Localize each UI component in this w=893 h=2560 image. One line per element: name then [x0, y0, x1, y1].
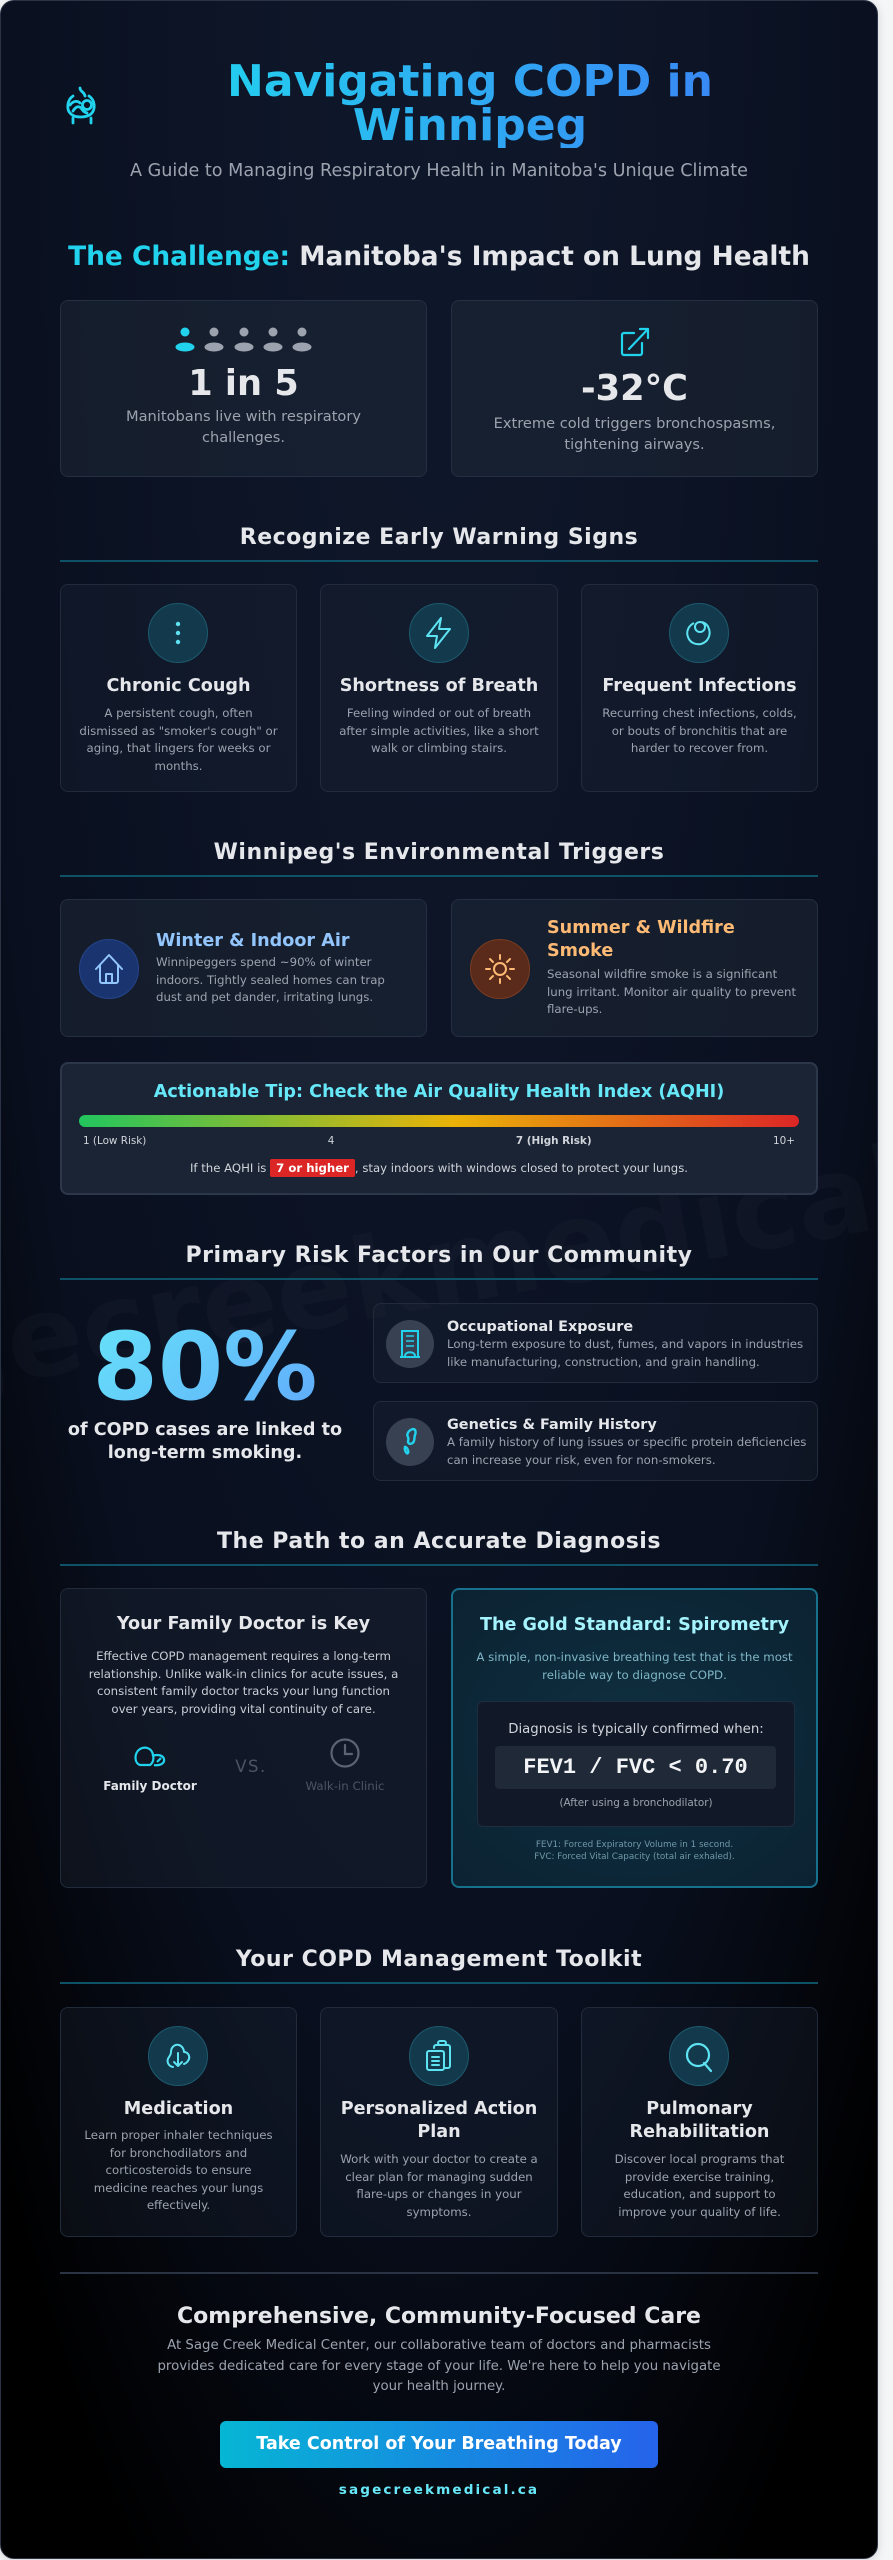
icon: people row [176, 328, 312, 352]
heading: environmental triggers: Winnipeg's Environmental Triggers [214, 840, 664, 865]
panel: summer and wildfire smoke [451, 899, 818, 1037]
footer divider [60, 2272, 818, 2274]
subtitle: A Guide to Managing Respiratory Health in Manitoba's Unique Climate [130, 161, 748, 181]
card title: Frequent Infections [602, 676, 797, 696]
abbreviations note: FVC: Forced Vital Capacity (total air exhaled). [534, 1852, 735, 1862]
tip title: Actionable Tip: Check the Air Quality Health Index (AQHI) [154, 1082, 724, 1102]
card text: Discover local programs that provide exercise training, education, and support to improve your quality of life. [615, 2152, 784, 2219]
icon: clipboard [409, 2026, 469, 2086]
icon: lungs logo [66, 86, 96, 124]
panel: spirometry [451, 1588, 818, 1888]
icon: infection [669, 603, 729, 663]
card text: Learn proper inhaler techniques for bronchodilators and corticosteroids to ensure medicine reaches your lungs effectively. [84, 2128, 273, 2212]
heading: toolkit: Your COPD Management Toolkit [236, 1947, 642, 1972]
panel: action plan [320, 2007, 558, 2237]
stat value: -32°C [581, 368, 688, 409]
card title: Pulmonary Rehabilitation [630, 2099, 769, 2142]
icon: house [79, 939, 139, 999]
heading: the challenge: The Challenge: Manitoba's Impact on Lung Health [68, 241, 810, 272]
label: Walk-in Clinic [305, 1779, 385, 1793]
card text: Winnipeggers spend ~90% of winter indoors. Tightly sealed homes can trap dust and pet dander, irritating lungs. [156, 955, 385, 1004]
stat description: Extreme cold triggers bronchospasms, tightening airways. [494, 415, 775, 453]
stat value: 1 in 5 [188, 363, 299, 404]
icon: magnifier [669, 2026, 729, 2086]
AQHI colour bar [79, 1115, 799, 1127]
card text: Seasonal wildfire smoke is a significant lung irritant. Monitor air quality to prevent flare-ups. [547, 967, 796, 1016]
panel: pulmonary rehabilitation [581, 2007, 818, 2237]
formula intro: Diagnosis is typically confirmed when: [508, 1722, 764, 1737]
panel: chronic cough [60, 584, 297, 792]
panel: frequent infections [581, 584, 818, 792]
card text: A persistent cough, often dismissed as "smoker's cough" or aging, that lingers for weeks or months. [79, 706, 278, 773]
stat description: Manitobans live with respiratory challenges. [126, 408, 361, 446]
icon: clock [330, 1738, 360, 1768]
AQHI scale labels: 7 (High Risk) [516, 1135, 592, 1147]
panel: family doctor [60, 1588, 427, 1888]
panel: medication [60, 2007, 297, 2237]
panel: 1 in 5 stat [60, 300, 427, 477]
card title: Winter & Indoor Air [156, 931, 350, 951]
icon: cloud download [148, 2026, 208, 2086]
vs label: VS. [235, 1757, 267, 1776]
tip text: If the AQHI is 7 or higher , stay indoors with windows closed to protect your lungs. [190, 1161, 688, 1175]
icon: dots [148, 603, 208, 663]
card title: Summer & Wildfire Smoke [547, 918, 735, 961]
heading: diagnosis: The Path to an Accurate Diagnosis [217, 1529, 661, 1554]
panel: cold stat [451, 300, 818, 477]
panel: genetics [373, 1401, 818, 1481]
call to action button: Take Control of Your Breathing Today [256, 2434, 622, 2454]
formula note: (After using a bronchodilator) [559, 1797, 713, 1809]
abbreviations note [534, 1840, 735, 1862]
AQHI scale labels [83, 1135, 795, 1147]
formula [495, 1746, 776, 1789]
heading: risk factors: Primary Risk Factors in Our Community [186, 1243, 692, 1268]
card text: Effective COPD management requires a long-term relationship. Unlike walk-in clinics for acute issues, a consistent family doctor tracks your lung function over years, providing vital continuity of care. [89, 1649, 398, 1716]
card title: Shortness of Breath [340, 676, 538, 696]
title: Navigating COPD in [227, 56, 713, 107]
card text: Recurring chest infections, colds, or bouts of bronchitis that are harder to recover from. [602, 706, 797, 755]
formula box [477, 1701, 795, 1827]
AQHI scale labels: 1 (Low Risk) [83, 1135, 146, 1147]
card text: Work with your doctor to create a clear plan for managing sudden flare-ups or changes in your symptoms. [340, 2152, 538, 2219]
icon: sun [470, 939, 530, 999]
card title: The Gold Standard: Spirometry [480, 1615, 789, 1635]
title: Winnipeg [353, 100, 587, 151]
abbreviations note: FEV1: Forced Expiratory Volume in 1 second. [536, 1840, 733, 1850]
card title: Genetics & Family History [447, 1417, 657, 1433]
card title: Medication [124, 2099, 233, 2119]
icon: external arrow [620, 328, 650, 356]
panel: AQHI tip [60, 1062, 818, 1195]
footer title: Comprehensive, Community-Focused Care [177, 2304, 701, 2329]
card title: Personalized Action Plan [341, 2099, 537, 2142]
card text: A family history of lung issues or specific protein deficiencies can increase your risk, even for non-smokers. [447, 1435, 806, 1467]
icon: lightning [409, 603, 469, 663]
card title: Occupational Exposure [447, 1319, 633, 1335]
heading: warning signs: Recognize Early Warning Signs [240, 525, 638, 550]
card title: Your Family Doctor is Key [117, 1614, 370, 1634]
formula: FEV1 / FVC < 0.70 [523, 1755, 748, 1780]
website link: sagecreekmedical.ca [339, 2482, 539, 2498]
call to action button [220, 2421, 658, 2468]
icon: doctor [134, 1746, 166, 1766]
footer text: At Sage Creek Medical Center, our collaborative team of doctors and pharmacists provides dedicated care for every stage of your life. We're here to help you navigate your health journey. [157, 2338, 721, 2394]
AQHI scale labels: 10+ [773, 1135, 795, 1147]
panel: occupational exposure [373, 1303, 818, 1383]
footer [60, 2272, 818, 2498]
icon: genes [386, 1418, 434, 1466]
card text: Feeling winded or out of breath after simple activities, like a short walk or climbing stairs. [339, 706, 539, 755]
panel: 80 percent stat [68, 1313, 342, 1463]
panel: shortness of breath [320, 584, 558, 792]
panel: winter and indoor air [60, 899, 427, 1037]
title [180, 60, 760, 148]
comparison: doctor vs clinic [103, 1738, 385, 1793]
icon: building [386, 1320, 434, 1368]
card title: Chronic Cough [107, 676, 250, 696]
big number: 80% [92, 1313, 318, 1422]
label: Family Doctor [103, 1779, 197, 1793]
AQHI scale labels: 4 [328, 1135, 334, 1147]
stat caption: of COPD cases are linked to long-term smoking. [68, 1420, 342, 1463]
card text: A simple, non-invasive breathing test that is the most reliable way to diagnose COPD. [476, 1650, 793, 1682]
card text: Long-term exposure to dust, fumes, and vapors in industries like manufacturing, construction, and grain handling. [447, 1337, 803, 1369]
